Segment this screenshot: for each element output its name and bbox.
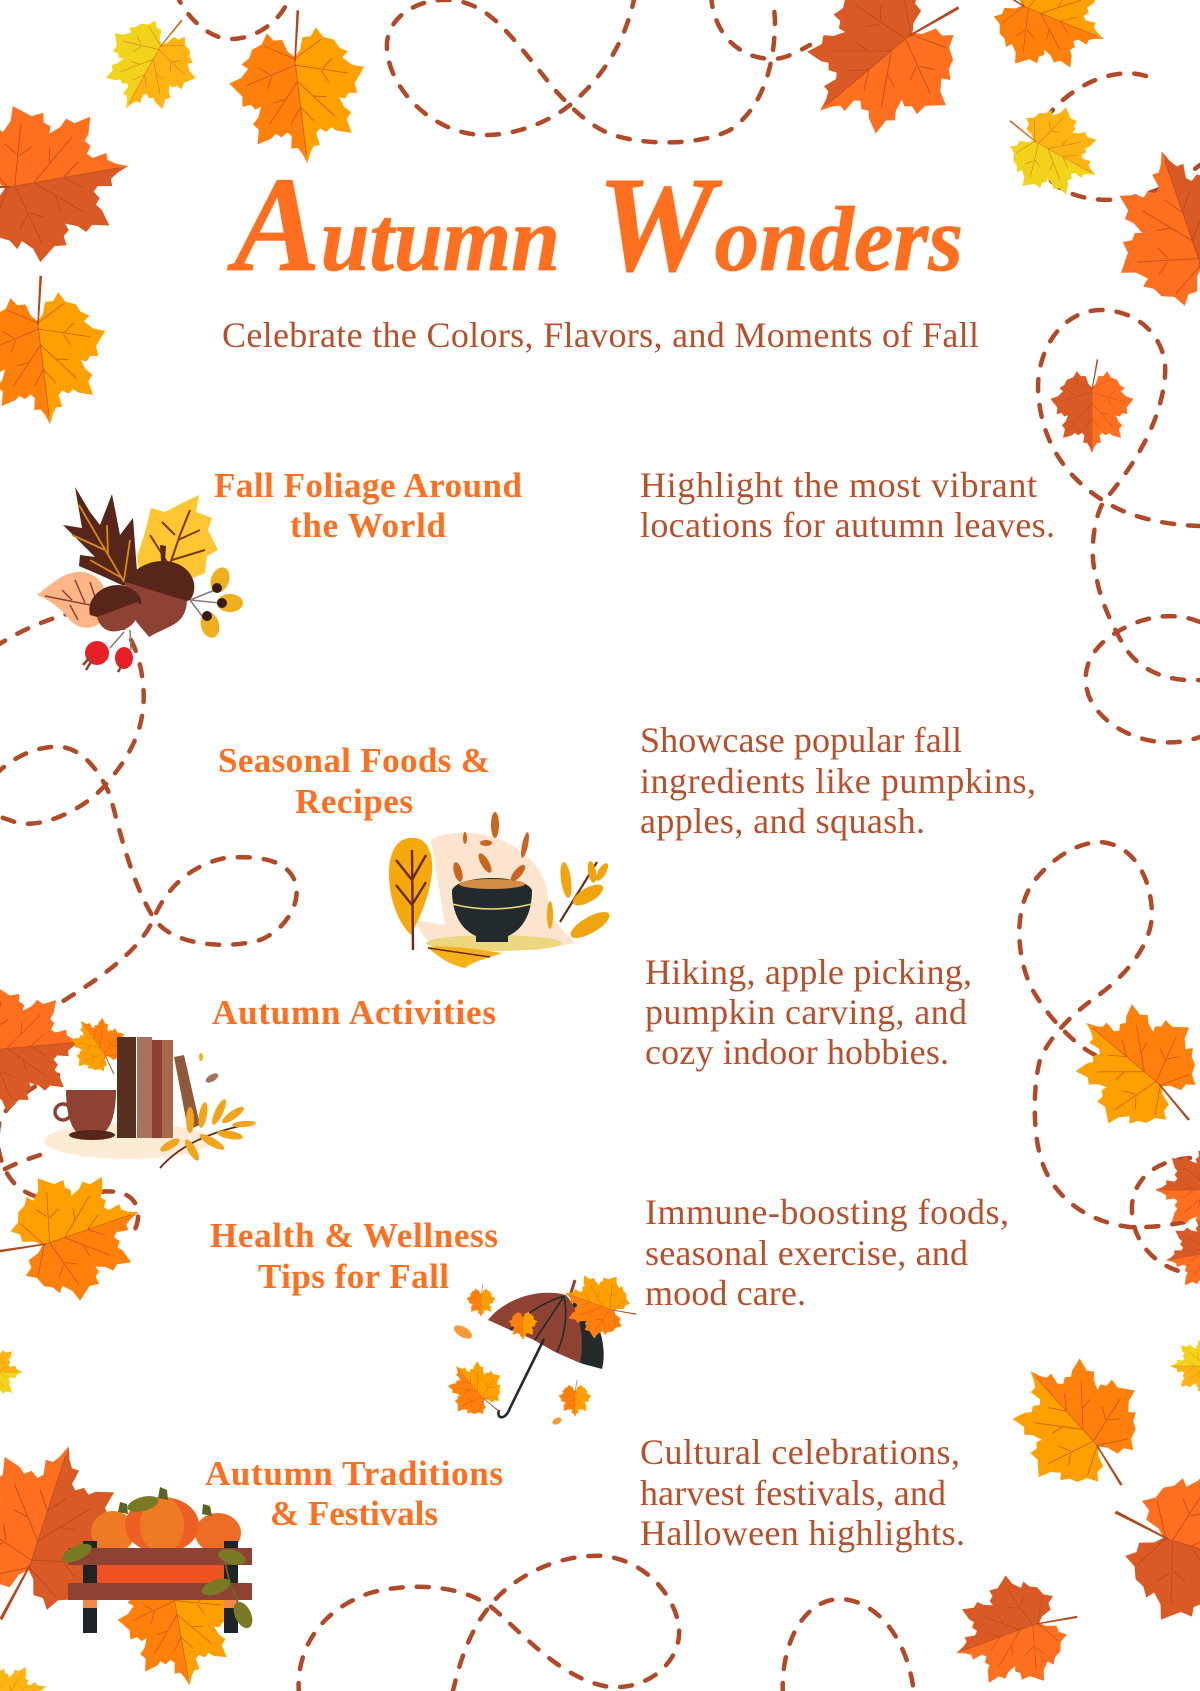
title — [226, 150, 963, 300]
icon: red leaves right edge — [1155, 1144, 1200, 1299]
text: autumn activities description: cozy indoor hobbies. — [645, 1032, 949, 1072]
icon: red leaf left — [0, 88, 142, 275]
icon: yellow leaf right — [985, 87, 1117, 214]
text: autumn activities description: Hiking, apple picking, — [645, 952, 972, 992]
text: autumn traditions description: Cultural celebrations, — [640, 1432, 960, 1472]
icon: small red leaf in loop — [1050, 359, 1134, 453]
illustration: umbrella with leaves — [435, 1262, 646, 1432]
text: health and wellness description: Immune-boosting foods, — [645, 1192, 1009, 1232]
icon: red leaf lower right edge — [1089, 1446, 1200, 1650]
text: seasonal foods description: ingredients like pumpkins, — [640, 761, 1036, 801]
text: health and wellness description: seasonal exercise, and — [645, 1233, 968, 1273]
icon: yellow leaf bottom corner — [0, 1652, 59, 1691]
text: fall foliage description: Highlight the most vibrant — [640, 465, 1037, 505]
illustration: bench with pumpkins — [60, 1487, 256, 1633]
icon: orange leaf left middle — [0, 1151, 160, 1321]
heading: autumn traditions: Autumn Traditions — [205, 1454, 503, 1493]
heading: fall foliage: the World — [290, 506, 447, 545]
icon: orange leaf top — [221, 3, 375, 172]
icon: red leaf bottom — [937, 1557, 1094, 1691]
title: Wonders — [597, 150, 963, 300]
heading: seasonal foods: Recipes — [295, 782, 413, 821]
text: fall foliage description: locations for autumn leaves. — [640, 505, 1055, 545]
icon: orange leaf top right corner — [965, 0, 1125, 91]
icon: yellow leaf top left — [86, 0, 217, 131]
icon: orange leaf right middle — [1046, 975, 1200, 1162]
title: Autumn — [226, 150, 560, 300]
heading: fall foliage: Fall Foliage Around — [214, 466, 523, 505]
text: seasonal foods description: apples, and squash. — [640, 801, 925, 841]
heading: autumn traditions: & Festivals — [270, 1494, 438, 1533]
icon: red leaf by activities — [0, 979, 88, 1117]
icon: orange leaf under bench — [108, 1543, 248, 1691]
text: health and wellness description: mood care. — [645, 1273, 806, 1313]
illustration: tea bowl — [389, 812, 613, 968]
illustration: acorns and leaves — [37, 487, 243, 672]
icon: yellow leaf left edge — [0, 1342, 23, 1402]
icon: orange leaf left — [0, 268, 116, 432]
text: seasonal foods description: Showcase popular fall — [640, 720, 962, 760]
icon: red leaf bottom left — [0, 1421, 147, 1649]
icon: red leaf right edge — [1088, 126, 1200, 343]
text: autumn traditions description: Halloween highlights. — [640, 1513, 965, 1553]
heading: health and wellness: Tips for Fall — [258, 1257, 449, 1296]
text: autumn activities description: pumpkin carving, and — [645, 992, 967, 1032]
heading: autumn activities: Autumn Activities — [212, 993, 496, 1032]
illustration: books and cup — [44, 1005, 256, 1168]
text: autumn traditions description: harvest festivals, and — [640, 1473, 946, 1513]
subtitle: Celebrate the Colors, Flavors, and Moments of Fall — [222, 315, 979, 355]
icon: orange leaf lower right — [982, 1328, 1176, 1523]
icon: red leaf top right — [771, 0, 1002, 169]
heading: health and wellness: Health & Wellness — [210, 1216, 498, 1255]
icon: yellow leaf right edge lower — [1170, 1336, 1200, 1396]
heading: seasonal foods: Seasonal Foods & — [218, 741, 490, 780]
